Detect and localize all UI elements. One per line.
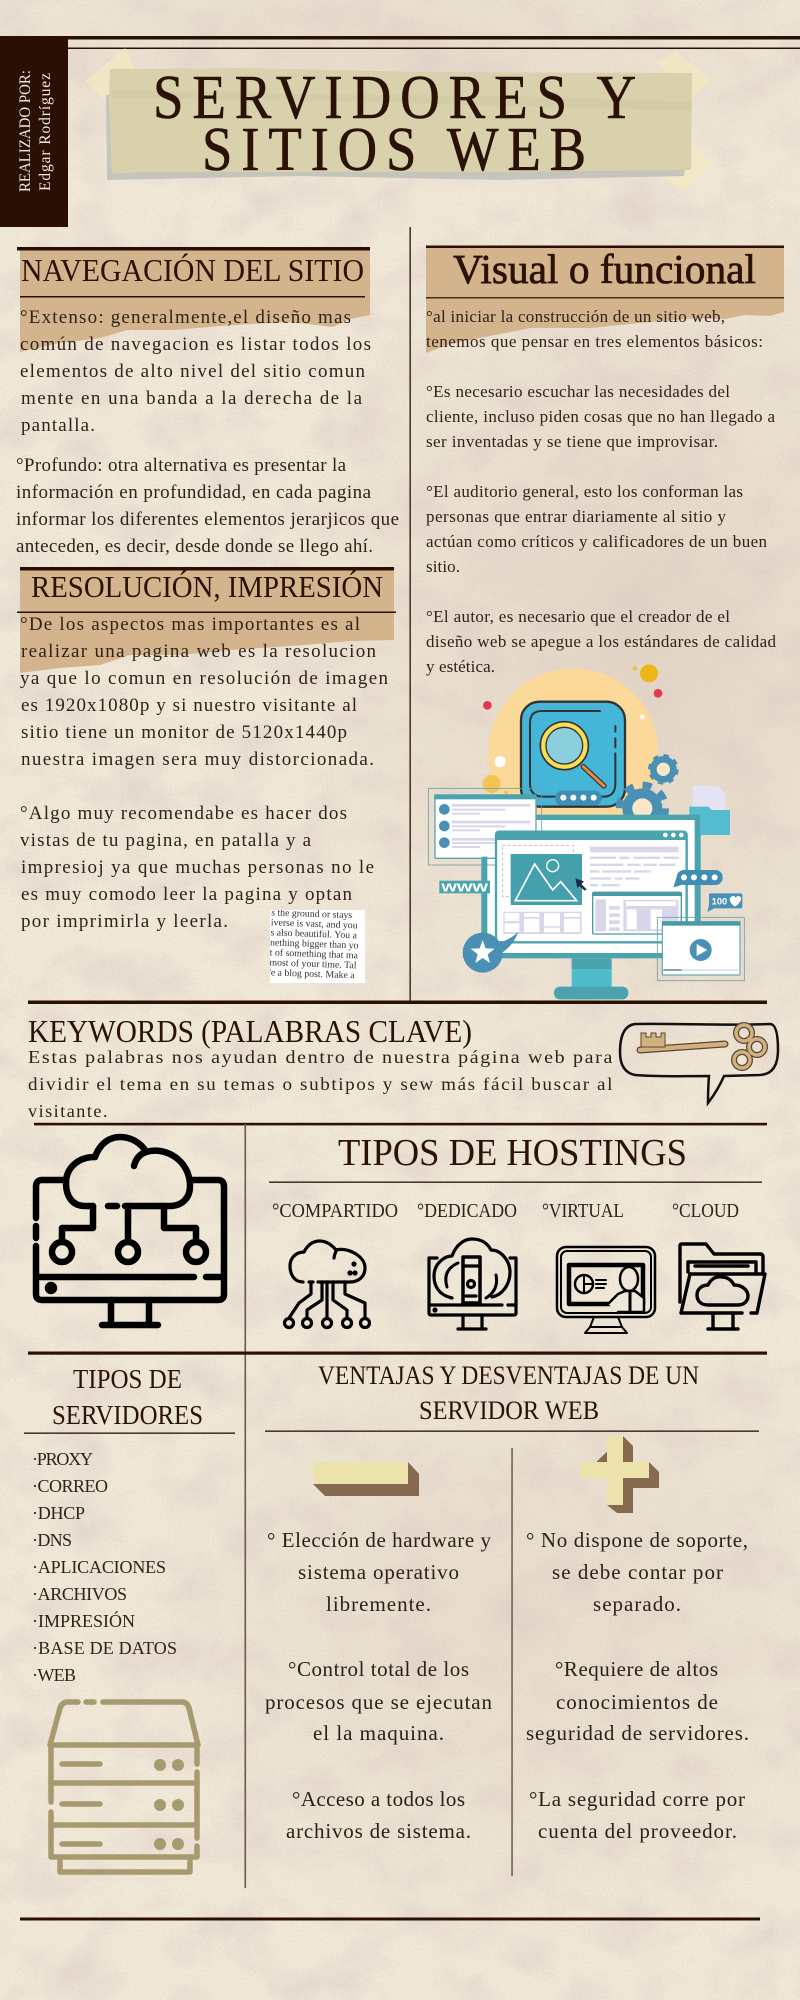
text block: dos vistas: vistas de tu pagina, en patalla y a [20, 830, 312, 851]
heading: TIPOS DE HOSTINGS [338, 1132, 687, 1174]
text block: profundo: °Profundo: otra alternativa es presentar la [16, 455, 347, 476]
text block: right column: separado. [593, 1592, 681, 1616]
text block: cliente: °Es necesario escuchar las necesidades del [426, 382, 730, 401]
icon: shared cloud [284, 1241, 370, 1328]
server type list: ·PROXY [32, 1449, 93, 1469]
text block: extenso: mente en una banda a la derecha de la [21, 388, 363, 409]
header rules [68, 36, 800, 49]
text block: left column: °Acceso a todos los [292, 1787, 465, 1811]
text block: dos vistas: °Algo muy recomendabe es hacer dos [20, 803, 347, 824]
text block: right column: cuenta del proveedor. [538, 1819, 737, 1843]
text block: profundo [16, 455, 399, 557]
text block: resolución: sitio tiene un monitor de 5120x1440p [21, 722, 347, 743]
server type list: ·CORREO [32, 1476, 108, 1496]
server type list: ·BASE DE DATOS [32, 1638, 177, 1658]
text block: profundo: anteceden, es decir, desde donde se llego ahí. [16, 536, 373, 557]
author tab [0, 36, 68, 227]
text block: auditorio: actúan como críticos y calificadores de un buen [426, 532, 768, 551]
text block: dos vistas: impresioj ya que muchas personas no le [21, 857, 374, 878]
text block: extenso [20, 307, 371, 436]
panel: keywords [28, 1013, 778, 1121]
newspaper snippet: 'e a blog post. Make a [269, 967, 355, 981]
text block [28, 1047, 614, 1121]
heading: SERVIDOR WEB [419, 1396, 599, 1425]
text block: profundo: informar los diferentes elementos jerarjicos que [16, 509, 399, 530]
text block: resolución: °De los aspectos mas importantes es al [20, 614, 360, 635]
illustration: web design monitor [428, 664, 744, 999]
server type list: ·IMPRESIÓN [32, 1610, 135, 1631]
server type list: ·DNS [32, 1530, 72, 1550]
icon: www tag [439, 879, 490, 895]
video window [657, 917, 744, 981]
icon: likes badge: 100 [712, 896, 727, 906]
icon: gears [619, 756, 677, 832]
monitor [484, 817, 701, 999]
icon: likes badge [707, 893, 742, 912]
icon: server stack [50, 1702, 198, 1872]
text block: extenso: elementos de alto nivel del sitio comun [20, 361, 366, 382]
hosting labels: °VIRTUAL [542, 1200, 624, 1222]
text block: dividir el tema en su temas o subtipos y sew más fácil buscar al [28, 1074, 614, 1094]
hosting labels: °CLOUD [672, 1200, 739, 1222]
newspaper snippet: t of something that ma [270, 947, 359, 961]
icon: cloud folder [680, 1244, 765, 1329]
panel: tipos de servidores [24, 1364, 235, 1872]
text block: auditorio: sitio. [426, 557, 460, 576]
text block: right column: °La seguridad corre por [529, 1787, 745, 1811]
newspaper snippet: s also beautiful. You a [270, 927, 358, 941]
heading: TIPOS DE [73, 1364, 182, 1394]
text block: Estas palabras nos ayudan dentro de nuestra página web para [28, 1047, 614, 1067]
text block: cliente [426, 382, 775, 451]
heading [52, 1364, 203, 1430]
heading: VENTAJAS Y DESVENTAJAS DE UN [318, 1361, 699, 1390]
title banner [85, 48, 712, 192]
text block: dos vistas: es muy comodo leer la pagina y optan [21, 884, 352, 905]
text block: dos vistas [20, 803, 374, 932]
text block: autor: y estética. [426, 657, 495, 676]
text block: right column: ° No dispone de soporte, [526, 1528, 748, 1552]
icon: search tile [521, 702, 625, 807]
heading [318, 1361, 699, 1425]
text block: elementos básicos: tenemos que pensar en tres elementos básicos: [426, 332, 763, 351]
newspaper snippet: nething bigger than yo [270, 937, 359, 951]
icon: www tag: www [440, 879, 489, 895]
text block: right column [526, 1528, 749, 1843]
text block: cliente: cliente, incluso piden cosas que no han llegado a [426, 407, 775, 426]
server type list: ·ARCHIVOS [32, 1584, 127, 1604]
text block: dos vistas: por imprimirla y leerla. [21, 911, 228, 932]
icon: key speech bubble [620, 1024, 778, 1103]
title text: SERVIDORES Y [153, 64, 645, 132]
text block: extenso: pantalla. [21, 415, 95, 436]
text block: resolución: ya que lo comun en resolución de imagen [20, 668, 388, 689]
heading: Visual o funcional [453, 246, 756, 292]
panel: tipos de hostings [269, 1132, 765, 1333]
bottom rule [20, 1918, 760, 1920]
text block: autor: °El autor, es necesario que el creador de el [426, 607, 730, 626]
text block: auditorio: personas que entrar diariamente al sitio y [426, 507, 726, 526]
text block: autor: diseño web se apegue a los estándares de calidad [426, 632, 776, 651]
hosting labels: °DEDICADO [417, 1200, 517, 1222]
column dividers [410, 227, 411, 1002]
text block: left column: archivos de sistema. [286, 1819, 471, 1843]
text block: auditorio [426, 482, 768, 576]
text block: left column: °Control total de los [288, 1657, 469, 1681]
server type list: ·DHCP [32, 1503, 85, 1523]
heading: SERVIDORES [52, 1400, 203, 1430]
heading: RESOLUCIÓN, IMPRESIÓN [31, 569, 383, 604]
text block: autor [426, 607, 776, 676]
title text: SITIOS WEB [202, 116, 595, 184]
text block: left column: libremente. [326, 1592, 431, 1616]
divider and column rule [28, 1123, 767, 1888]
text block: elementos básicos: °al iniciar la construcción de un sitio web, [426, 307, 725, 326]
server type list [32, 1449, 177, 1685]
newspaper snippet: s the ground or stays [271, 907, 353, 921]
browser window: main [495, 831, 687, 942]
text block: elementos básicos [426, 307, 763, 351]
newspaper snippet: most of your time. Tal [269, 957, 357, 971]
text block: resolución: realizar una pagina web es la resolucion [21, 641, 377, 662]
server type list: ·WEB [32, 1665, 76, 1685]
panel: ventajas y desventajas [265, 1361, 759, 1876]
icon: minus [313, 1462, 419, 1496]
text block: cliente: ser inventadas y se tiene que improvisar. [426, 432, 718, 451]
icon: plus [580, 1436, 659, 1513]
icon: cloud computing monitor [36, 1137, 224, 1325]
newspaper snippet [269, 907, 365, 983]
icon: folder [689, 786, 730, 835]
server type list: ·APLICACIONES [32, 1557, 166, 1577]
author tab: REALIZADO POR: [17, 70, 34, 192]
text block: visitante. [28, 1101, 109, 1121]
icon: star badge [463, 932, 518, 973]
text block: resolución: es 1920x1080p y si nuestro visitante al [21, 695, 357, 716]
panel: navegación del sitio [16, 247, 399, 557]
text block: right column: °Requiere de altos [555, 1657, 718, 1681]
text block: extenso: °Extenso: generalmente,el diseño mas [20, 307, 351, 328]
text block: right column: conocimientos de [556, 1690, 718, 1714]
icon: chat bubble right [673, 870, 723, 887]
hosting labels: °COMPARTIDO [272, 1200, 398, 1222]
text block: left column: ° Elección de hardware y [267, 1528, 492, 1552]
text block: resolución [20, 614, 388, 770]
hosting labels [272, 1200, 739, 1222]
text block: auditorio: °El auditorio general, esto los conforman las [426, 482, 743, 501]
heading: NAVEGACIÓN DEL SITIO [21, 252, 364, 288]
text block: profundo: información en profundidad, en cada pagina [16, 482, 372, 503]
newspaper snippet: iverse is vast, and you [271, 917, 358, 931]
browser window: list [428, 788, 542, 865]
panel: resolución, impresión [17, 567, 396, 932]
text block: left column: sistema operativo [298, 1560, 459, 1584]
text block: resolución: nuestra imagen sera muy distorcionada. [21, 749, 374, 770]
icon: chat bubble [555, 791, 602, 806]
text block: left column [265, 1528, 492, 1843]
divider under top section [28, 1000, 767, 1004]
heading: KEYWORDS (PALABRAS CLAVE) [28, 1013, 472, 1049]
text block: extenso: común de navegacion es listar todos los [20, 334, 371, 355]
text block: left column: procesos que se ejecutan [265, 1690, 492, 1714]
text block: left column: el la maquina. [313, 1721, 444, 1745]
icon: dedicated server [429, 1239, 516, 1329]
author tab: Edgar Rodríguez [37, 73, 54, 191]
text block: right column: se debe contar por [552, 1560, 723, 1584]
text block: right column: seguridad de servidores. [526, 1721, 749, 1745]
icon: virtual presenter [557, 1247, 655, 1333]
title text [153, 64, 645, 184]
panel: visual o funcional [426, 246, 784, 676]
